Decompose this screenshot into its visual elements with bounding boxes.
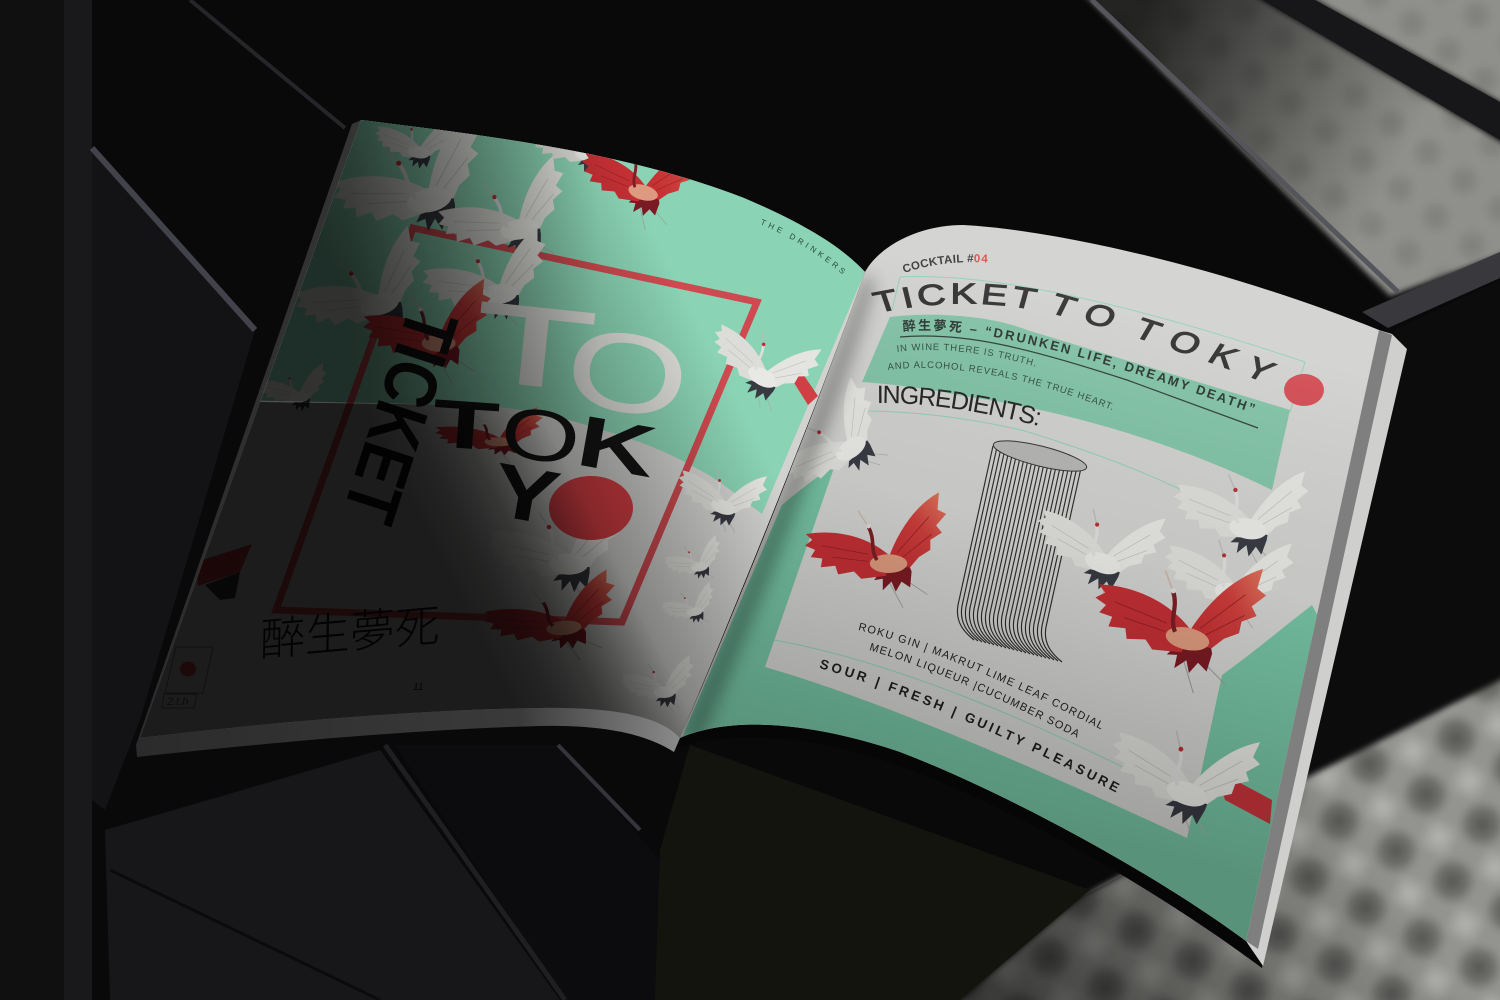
- page number 12: 12: [937, 774, 954, 791]
- mint band: [862, 315, 1290, 490]
- black heading TOKY: K: [571, 401, 662, 493]
- proverb line one: IN WINE THERE IS TRUTH.: [897, 344, 1036, 366]
- red frame: [276, 228, 757, 622]
- ingredients line one: ROKU GIN | MAKRUT LIME LEAF CORDIAL: [858, 622, 1102, 730]
- crane group top: [263, 126, 691, 411]
- ingredients line two: MELON LIQUEUR |CUCUMBER SODA: [870, 643, 1078, 738]
- quote rule: [900, 336, 1258, 428]
- white heading TO: T: [470, 280, 599, 414]
- white heading TO: O: [557, 302, 698, 444]
- label: cocktail number: COCKTAIL #04: [902, 254, 988, 272]
- proverb line two: AND ALCOHOL REVEALS THE TRUE HEART.: [888, 361, 1112, 410]
- icon: flag: [162, 647, 213, 708]
- panel: right page: [680, 225, 1379, 941]
- icon: flag: 2.t.h: [166, 696, 188, 708]
- mint surround: [680, 465, 1320, 941]
- mint background: [230, 110, 870, 514]
- crane group lower: [196, 407, 771, 711]
- black heading TOKY: [435, 399, 656, 521]
- crane with red tail: [714, 324, 822, 410]
- panel: foam lower right: [920, 660, 1500, 1000]
- frame lines: [774, 277, 1305, 802]
- cranes on right page: [760, 374, 1312, 849]
- panel: black block under book: [655, 745, 1090, 1000]
- page block right: [1246, 330, 1407, 966]
- red dot: [1284, 374, 1324, 406]
- book cover under right page: [676, 325, 1400, 968]
- panel: dark shelf wall right: [1250, 252, 1500, 960]
- title: TICKET TO TOKY: [871, 283, 1278, 380]
- black heading TOKY: O: [494, 389, 587, 482]
- panel: left page: [140, 120, 865, 738]
- page shading: [680, 254, 1332, 941]
- kanji heading: 醉生夢死: [260, 599, 440, 666]
- black heading TICKET: TICKET: [327, 299, 474, 533]
- flavour line: SOUR | FRESH | GUILTY PLEASURE: [820, 660, 1120, 792]
- running head: THE DRINKERS: [762, 219, 845, 274]
- shadow across left page: [140, 120, 772, 738]
- page number 11: 11: [413, 682, 423, 693]
- black heading TOKY: T: [430, 385, 502, 466]
- page block left: [136, 120, 680, 757]
- quote: 醉生夢死 – “DRUNKEN LIFE, DREAMY DEATH”: [902, 318, 1256, 410]
- black heading TOKY: Y: [486, 446, 566, 542]
- page edge strip: [1246, 330, 1392, 949]
- ingredients heading: INGREDIENTS:: [879, 386, 1040, 426]
- panel: foam upper right: [1050, 0, 1500, 296]
- white heading TO: [480, 301, 682, 414]
- red sun: [549, 476, 633, 540]
- book: [136, 120, 1407, 968]
- glass illustration: [957, 435, 1089, 662]
